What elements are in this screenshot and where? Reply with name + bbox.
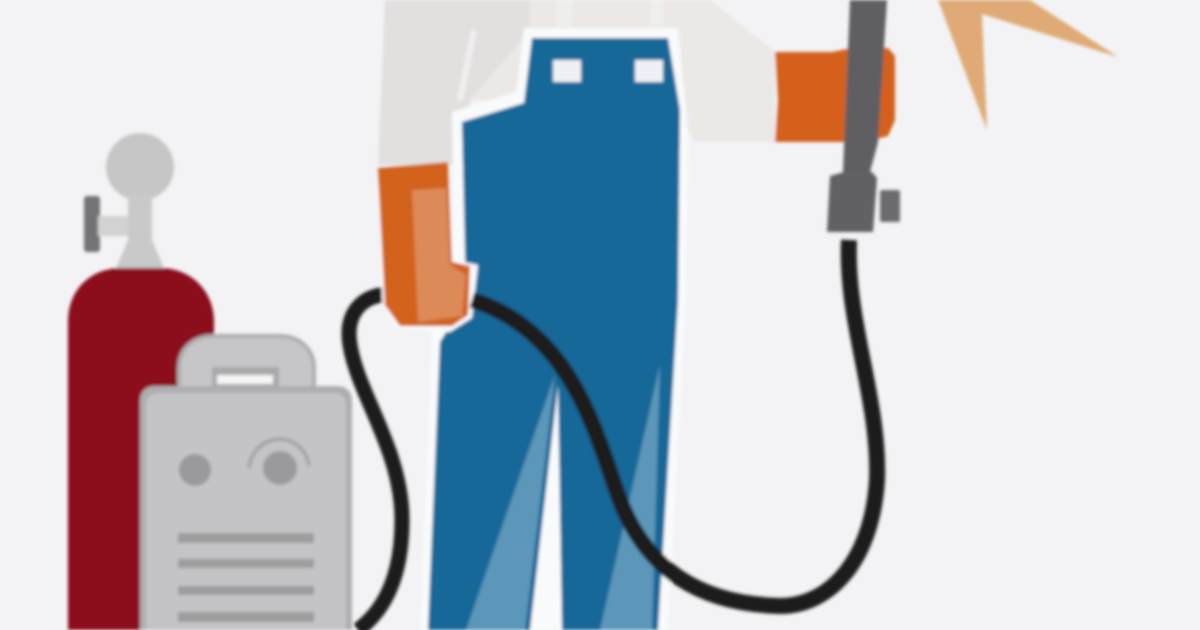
jeans highlight right xyxy=(600,365,660,630)
worker: shirt xyxy=(378,0,775,165)
worker: right glove xyxy=(775,48,895,142)
worker: jeans white outline xyxy=(420,28,688,630)
icon: left cable xyxy=(349,294,402,630)
belt loop left xyxy=(553,60,581,82)
icon: welding torch xyxy=(827,0,900,232)
icon: welding machine xyxy=(140,336,352,630)
jeans highlight left xyxy=(466,375,555,630)
belt loop right xyxy=(635,60,663,82)
worker: left glove xyxy=(378,162,478,332)
icon: sparks xyxy=(938,0,1118,130)
right cable xyxy=(472,240,877,606)
worker: jeans xyxy=(428,38,680,630)
icon: gas cylinder xyxy=(68,133,214,630)
